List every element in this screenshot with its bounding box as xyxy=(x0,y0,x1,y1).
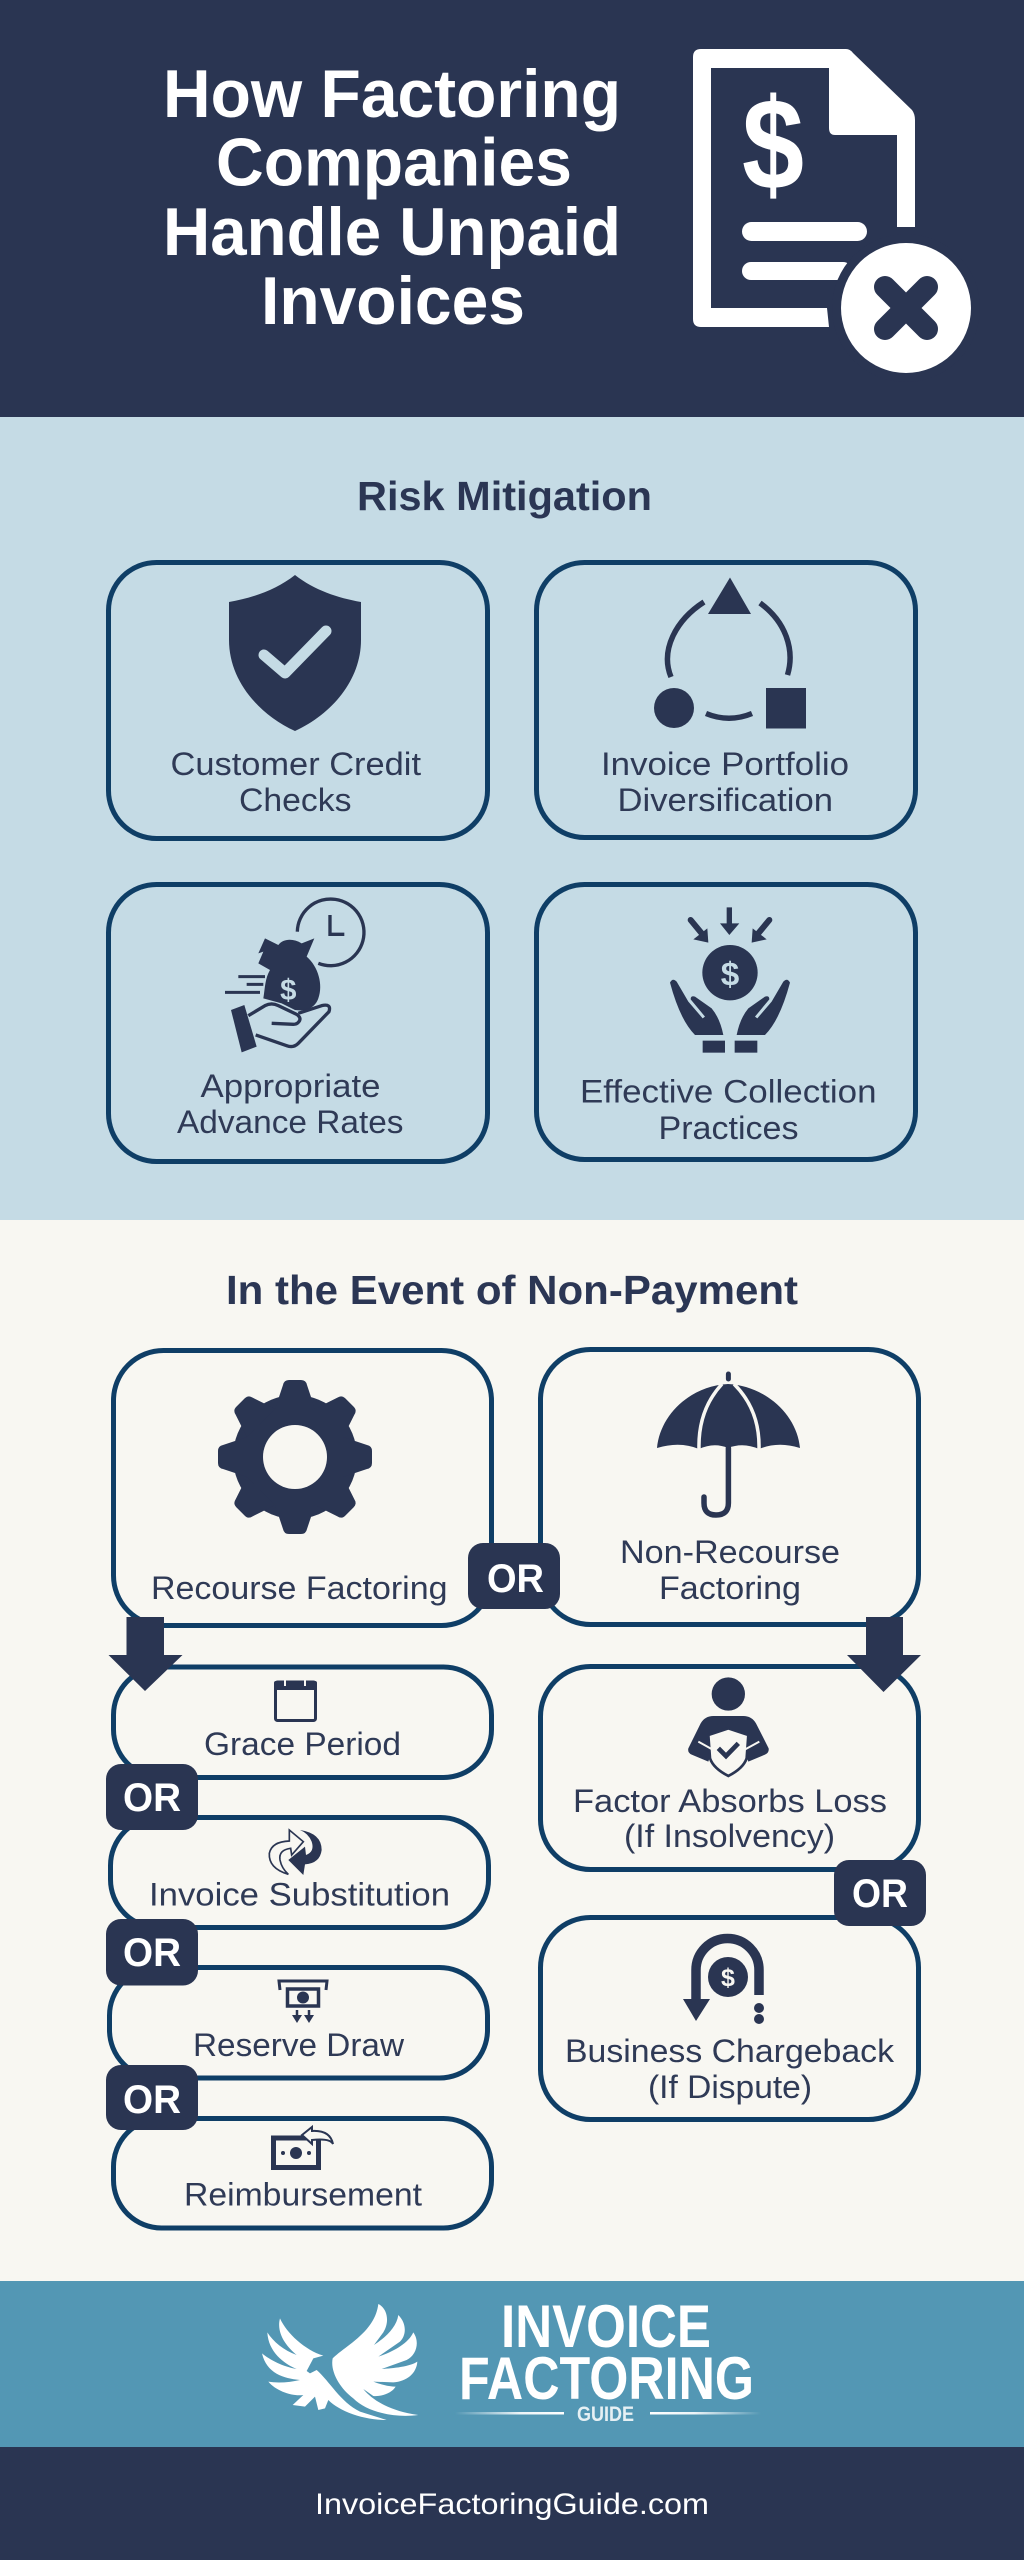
panel: risk mitigation xyxy=(0,417,1024,1220)
icon: hands holding a coin with inward arrows: $ xyxy=(721,956,740,993)
label xyxy=(573,1783,887,1854)
icon: calendar xyxy=(274,1679,317,1720)
card: recourse factoring xyxy=(114,1350,492,1626)
title: How Factoring xyxy=(163,56,621,132)
label xyxy=(580,1074,876,1146)
label: Non-Recourse xyxy=(620,1534,840,1570)
label: Business Chargeback xyxy=(565,2033,895,2069)
label: Invoice Portfolio xyxy=(601,746,849,782)
title: Invoices xyxy=(261,263,525,339)
arrow: recourse to grace period xyxy=(108,1617,182,1691)
footer bar xyxy=(0,2447,1024,2560)
label: Customer Credit xyxy=(170,746,421,782)
card: effective collection practices xyxy=(536,884,916,1160)
title: Handle Unpaid xyxy=(163,194,621,270)
label: Reimbursement xyxy=(184,2176,422,2212)
label: Advance Rates xyxy=(177,1104,404,1140)
icon: swap arrows xyxy=(269,1830,322,1875)
label: Invoice Substitution xyxy=(149,1876,450,1912)
icon: cash dispenser xyxy=(279,1981,327,2023)
icon: chargeback arrow around coin: $ xyxy=(721,1964,735,1992)
title: Companies xyxy=(216,124,572,200)
label xyxy=(565,2033,895,2105)
label xyxy=(620,1534,840,1606)
badge: OR after reserve draw: OR xyxy=(123,2078,181,2122)
label: Checks xyxy=(239,782,352,818)
label: (If Insolvency) xyxy=(624,1818,835,1854)
card: factor absorbs loss xyxy=(540,1666,918,1870)
label: Grace Period xyxy=(204,1726,401,1762)
label xyxy=(170,746,421,818)
label: Factor Absorbs Loss xyxy=(573,1783,887,1819)
label: (If Dispute) xyxy=(648,2069,812,2105)
card: invoice substitution xyxy=(110,1818,488,1928)
logo band xyxy=(0,2281,1024,2447)
badge: OR after grace period xyxy=(106,1764,198,1830)
icon: unpaid invoice document with X xyxy=(693,49,980,382)
logo: bird xyxy=(262,2304,418,2420)
icon: money bag, clock and hand: $ xyxy=(280,974,296,1007)
badge: OR between recourse and non-recourse xyxy=(468,1543,560,1609)
card: reimbursement xyxy=(114,2118,492,2228)
header banner xyxy=(0,0,1024,417)
card: grace period xyxy=(114,1667,492,1778)
badge: OR between recourse and non-recourse: OR xyxy=(487,1557,544,1601)
card: non-recourse factoring xyxy=(540,1350,918,1624)
card: customer credit checks xyxy=(108,562,488,838)
card: appropriate advance rates xyxy=(108,884,488,1162)
arrow: non-recourse to factor absorbs loss xyxy=(847,1617,921,1692)
label: Effective Collection xyxy=(580,1074,876,1110)
icon: chargeback arrow around coin xyxy=(683,1938,764,2024)
badge: OR after invoice substitution xyxy=(106,1919,198,1986)
label: Factoring xyxy=(659,1570,801,1606)
logo: wordmark: INVOICE xyxy=(501,2293,711,2360)
label: Appropriate xyxy=(200,1068,380,1104)
icon: banknote with return arrow xyxy=(274,2127,333,2168)
label: Practices xyxy=(658,1110,798,1146)
icon: hands holding a coin with inward arrows xyxy=(670,907,790,1053)
icon: shapes in a cycle xyxy=(654,578,806,728)
label xyxy=(177,1068,404,1140)
title xyxy=(163,56,621,339)
panel: in the event of non-payment xyxy=(0,1220,1024,2281)
footer url: InvoiceFactoringGuide.com xyxy=(315,2488,709,2521)
badge: OR after invoice substitution: OR xyxy=(123,1931,181,1975)
logo: wordmark xyxy=(455,2293,761,2426)
label xyxy=(601,746,849,818)
badge: OR after grace period: OR xyxy=(123,1776,181,1820)
card: invoice portfolio diversification xyxy=(536,562,916,838)
icon: shield with check xyxy=(229,575,361,731)
icon: unpaid invoice document with X: $ xyxy=(742,71,804,217)
heading: risk mitigation: Risk Mitigation xyxy=(357,473,652,519)
badge: OR between factor absorbs loss and chargeback: OR xyxy=(852,1872,908,1916)
badge: OR after reserve draw xyxy=(106,2065,198,2130)
label: Diversification xyxy=(618,782,833,818)
card: business chargeback xyxy=(540,1918,918,2120)
logo: wordmark: FACTORING xyxy=(459,2345,754,2412)
icon: gear xyxy=(218,1380,372,1534)
heading: in the event of non-payment: In the Event of Non-Payment xyxy=(226,1267,798,1313)
label: Reserve Draw xyxy=(193,2027,405,2063)
card: reserve draw xyxy=(110,1968,488,2078)
icon: money bag, clock and hand xyxy=(225,899,364,1052)
icon: person holding shield xyxy=(688,1677,769,1776)
label: Recourse Factoring xyxy=(151,1570,448,1606)
badge: OR between factor absorbs loss and chargeback xyxy=(834,1860,926,1926)
logo: wordmark: GUIDE xyxy=(577,2403,634,2426)
icon: umbrella xyxy=(657,1374,800,1515)
